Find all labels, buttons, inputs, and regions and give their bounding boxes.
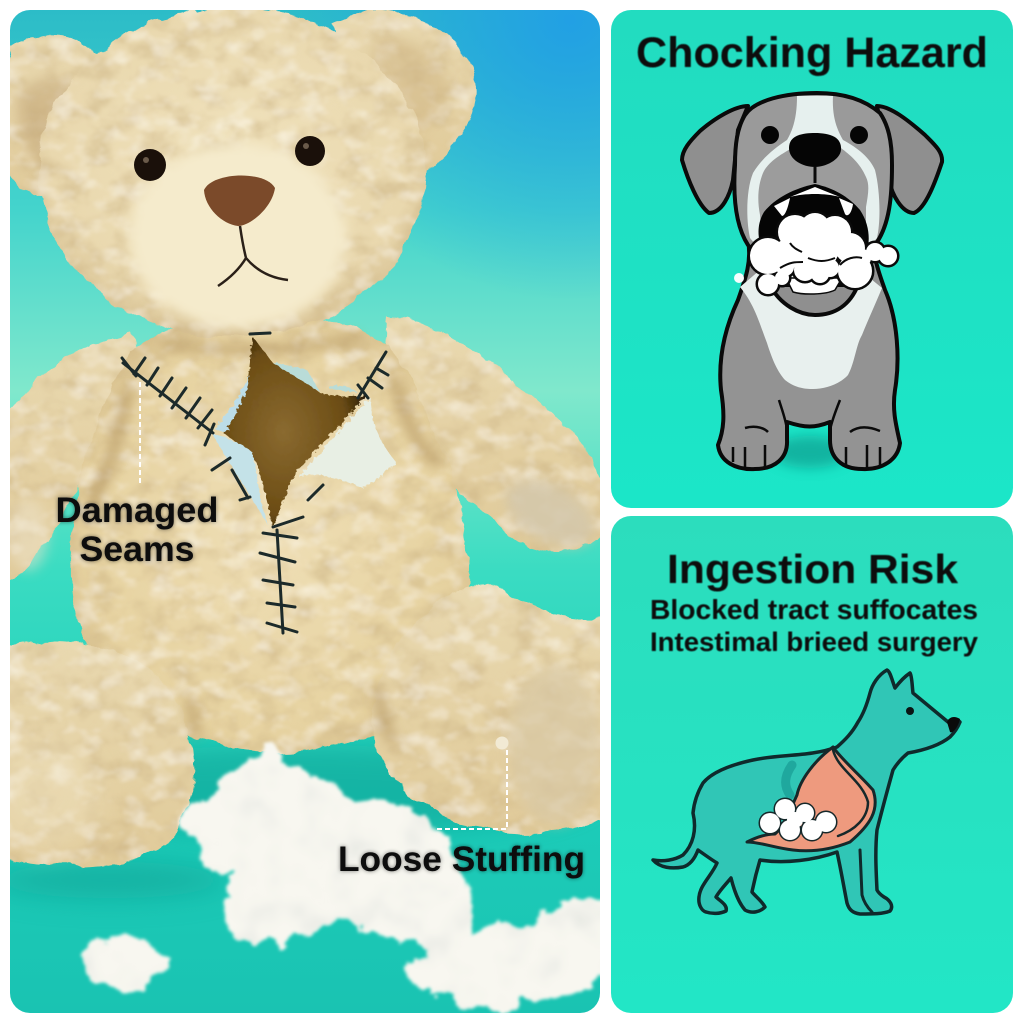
dog open mouth [758,184,869,248]
bear arms and legs [0,315,610,866]
dog lower jaw [770,285,858,315]
heading: ingestion risk: Ingestion Risk [667,546,958,592]
bear fur shading [92,338,436,740]
panel: teddy bear photo [0,7,615,1013]
callout line: damaged seams [139,382,141,486]
dog eyes and nose [761,126,868,167]
panel: ingestion risk [611,516,1013,1013]
dog head [734,93,892,268]
text: risk description [650,594,978,657]
stuffing: loose cotton [82,745,615,1007]
dog silhouette [653,670,960,914]
dog body [718,240,900,469]
dog chest patch [740,270,882,389]
dog eye and nose [906,707,914,715]
bear foot pads [508,479,600,554]
dog body shade [786,765,792,795]
bear mouth [218,226,288,286]
bear eyes [134,136,325,181]
dog face blaze [747,96,879,250]
bear nose [204,175,275,226]
callout line: loose stuffing [436,736,508,829]
heading: chocking hazard: Chocking Hazard [636,29,988,77]
cotton stuffing in mouth [750,213,897,294]
stitched seams [122,333,388,633]
label: loose stuffing: Loose Stuffing [338,840,585,879]
dog ears [682,106,748,213]
bear head [38,7,426,337]
label: damaged seams: Seams [80,530,194,569]
text: risk description: Intestimal brieed surgery [650,627,978,657]
torn chest hole [212,337,397,527]
label: damaged seams [56,491,218,569]
cyan speck [734,273,744,283]
bear ears [0,13,476,205]
label: damaged seams: Damaged [56,491,218,530]
bear muzzle [130,144,346,328]
icon: dog with stuffing in stomach [653,670,960,914]
cotton in stomach [760,799,836,840]
panel: choking hazard [611,10,1013,508]
teddy bear [0,7,610,866]
dog front leg line [860,850,872,912]
text: risk description: Blocked tract suffocates [650,594,978,625]
stomach organ [747,747,875,851]
dog muzzle [758,148,868,240]
dog shadow [772,436,848,468]
icon: grey dog with cotton in mouth [682,93,942,469]
dog legs and toes [733,400,880,468]
